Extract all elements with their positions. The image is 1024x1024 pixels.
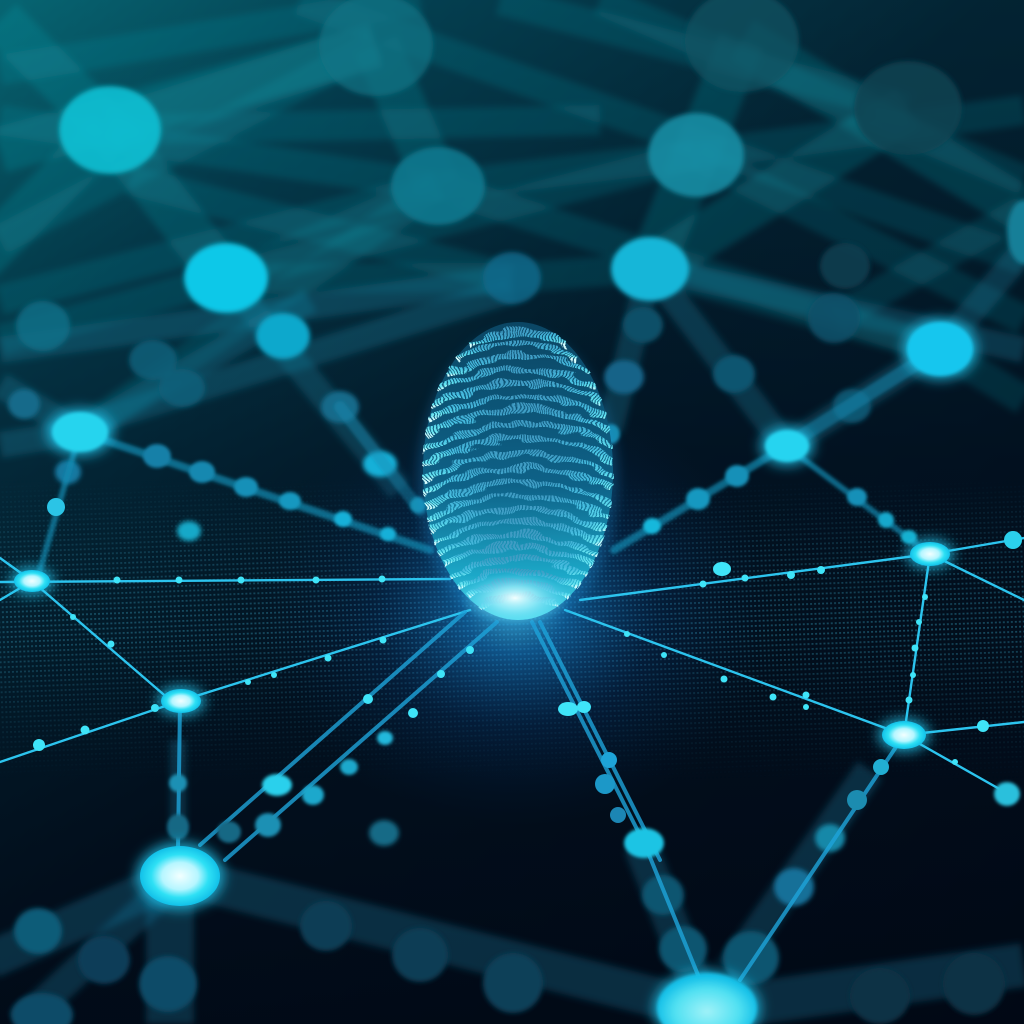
network lines near the fingerprint xyxy=(0,349,1024,980)
fingerprint base glow xyxy=(459,570,571,626)
fingerprint xyxy=(418,322,618,630)
sharp thin lines xyxy=(0,538,1024,795)
foreground wide lines at the bottom xyxy=(0,740,1024,1024)
blurred upper lines xyxy=(40,349,940,570)
medium lines xyxy=(178,612,904,980)
central glow xyxy=(255,395,775,825)
small sharp nodes along lines xyxy=(33,498,1022,823)
medium nodes on the blurred lines xyxy=(143,424,1020,858)
hub discs xyxy=(52,322,973,1024)
wide blurred background network lines xyxy=(0,0,1024,490)
dotted floor texture xyxy=(0,496,1024,756)
bright hub nodes xyxy=(10,318,978,1024)
hub glows xyxy=(10,318,978,1024)
fingerprint ridges xyxy=(422,332,614,607)
